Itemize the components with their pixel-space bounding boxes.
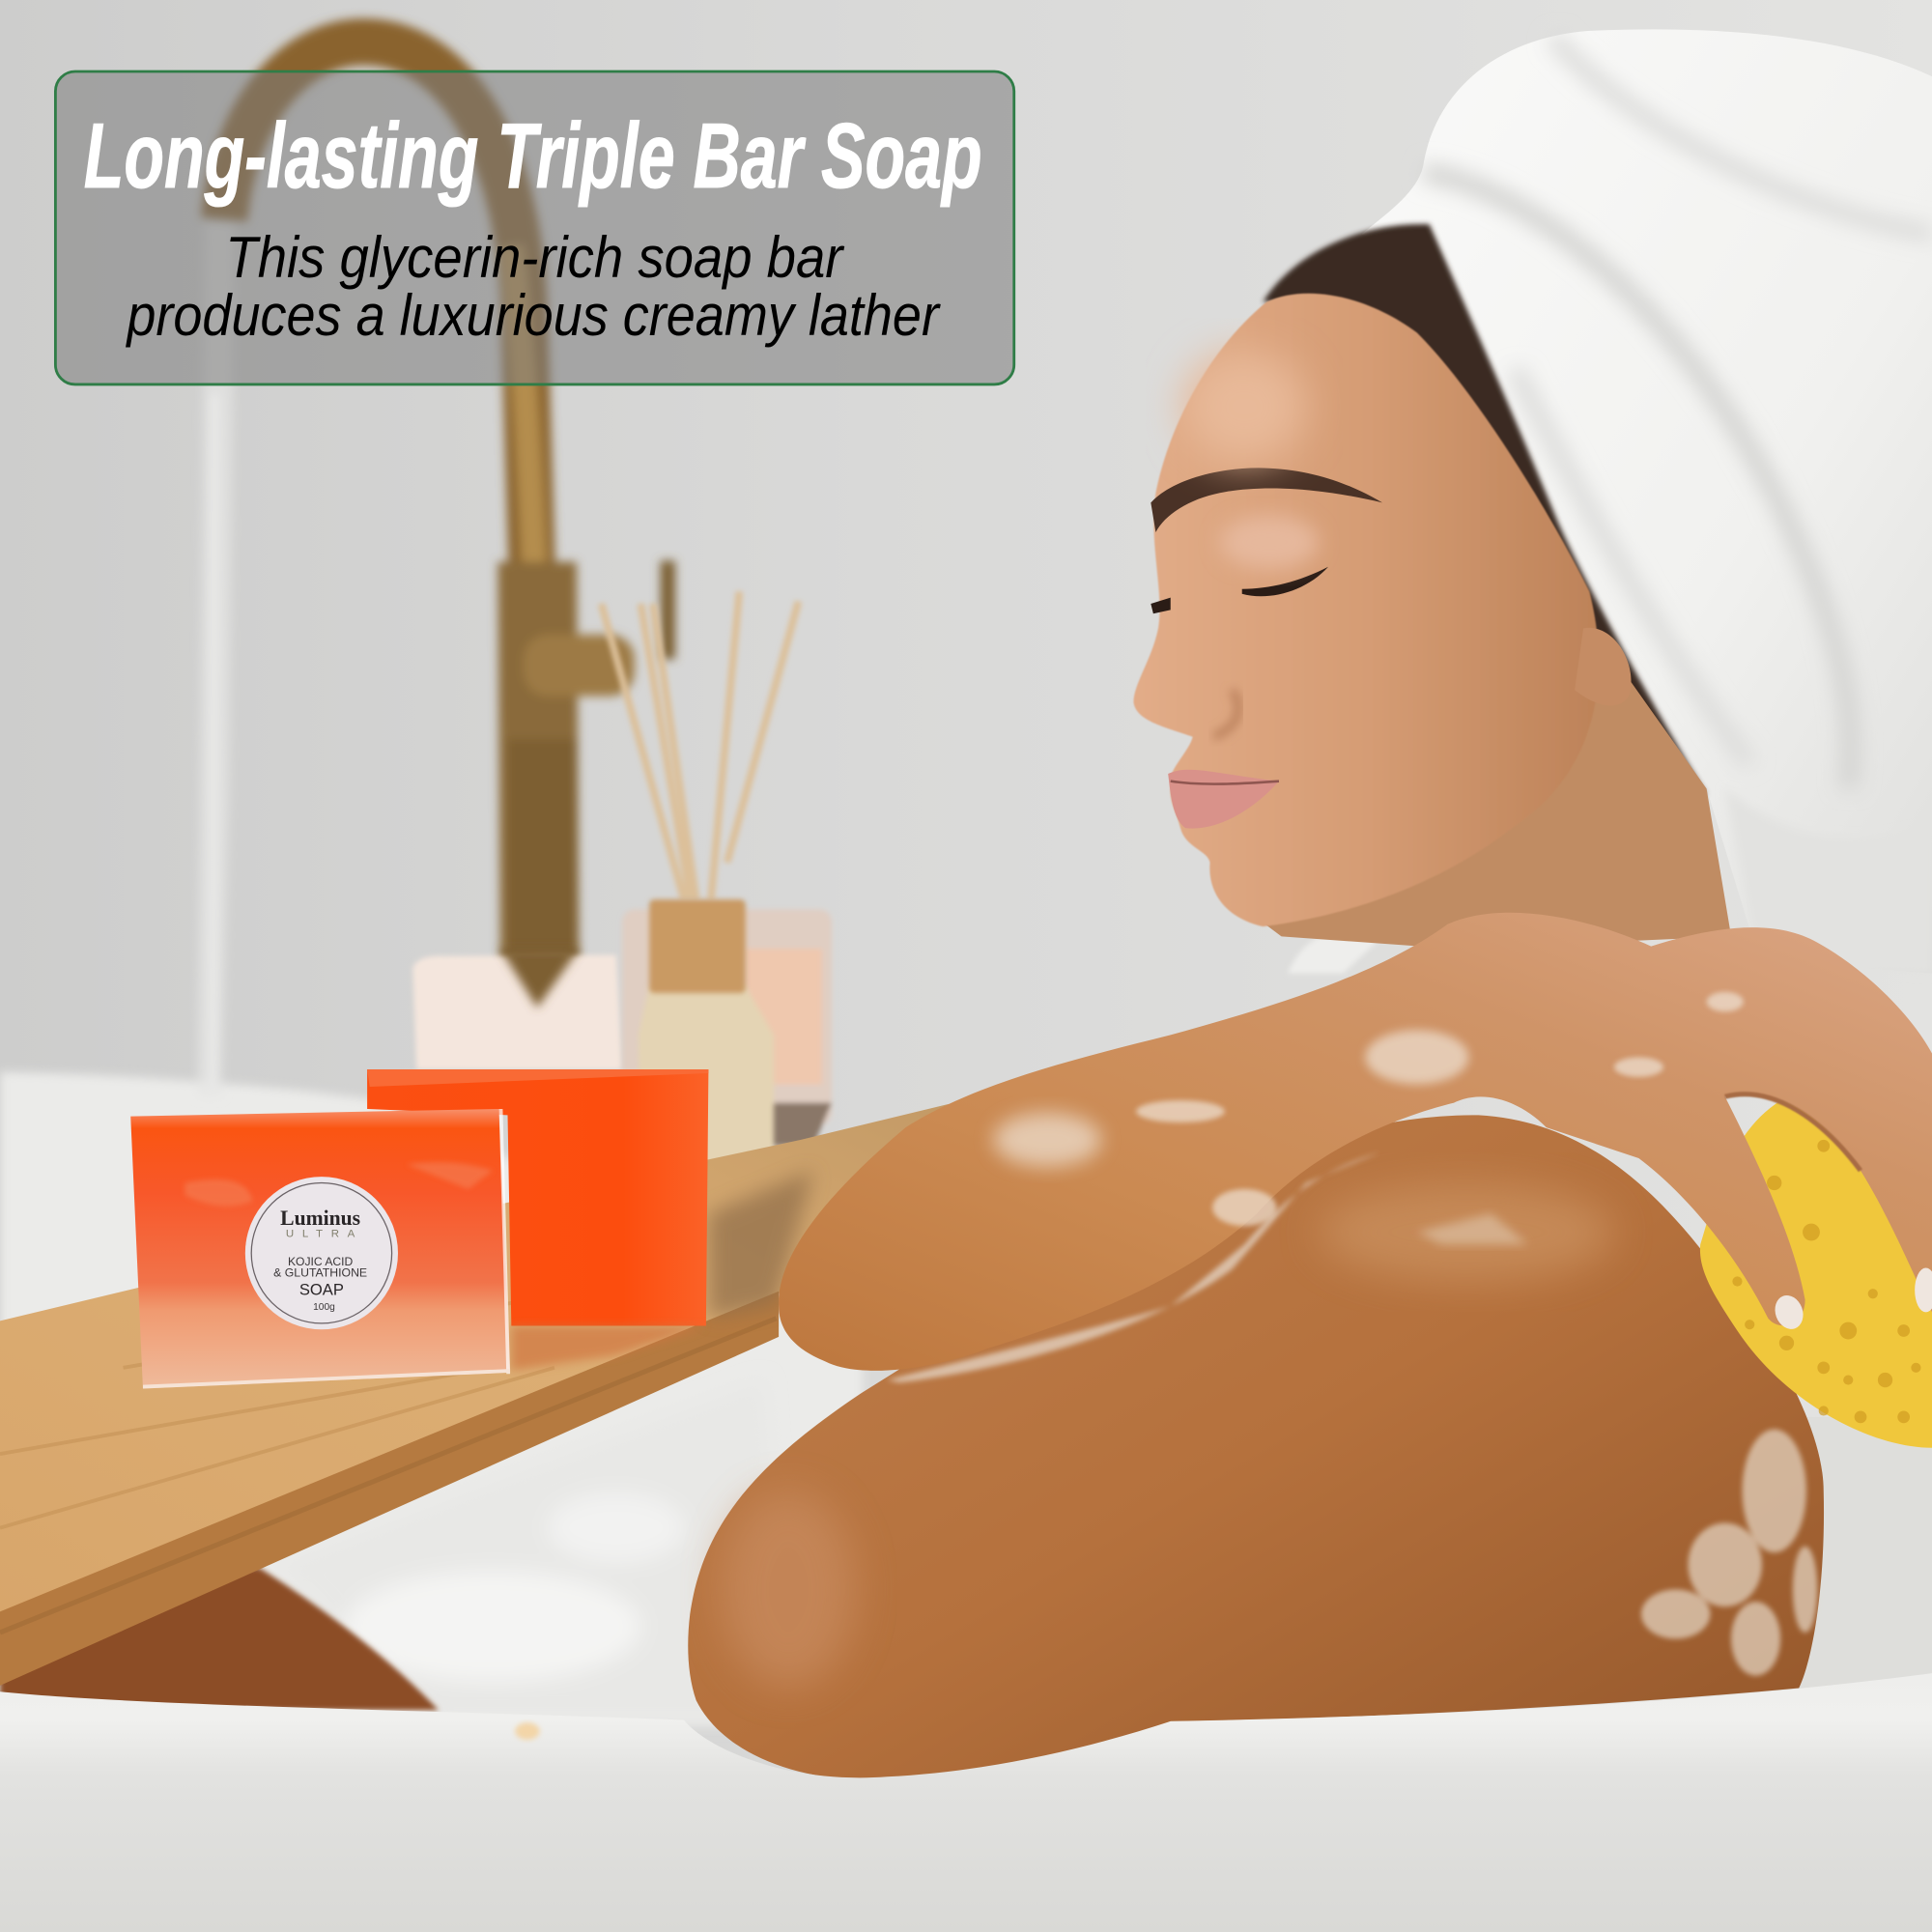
front soap bar	[130, 1109, 510, 1389]
product label: ULTRA	[286, 1229, 355, 1240]
bath foam	[277, 1380, 788, 1719]
reed diffuser	[601, 591, 799, 1193]
towel	[1361, 29, 1932, 974]
fingernails	[1771, 1292, 1807, 1333]
foam patches on forearm	[993, 992, 1744, 1226]
product label: SOAP	[299, 1281, 344, 1299]
neck	[1233, 640, 1731, 949]
product label: Luminus	[280, 1207, 360, 1230]
brass faucet	[224, 42, 675, 1006]
back soap bar	[367, 1069, 708, 1370]
subtitle	[126, 225, 941, 348]
headline panel	[55, 71, 1014, 384]
ear	[1575, 628, 1632, 705]
subtitle: produces a luxurious creamy lather	[126, 283, 941, 348]
forehead highlight	[1182, 352, 1306, 462]
eyelid highlight	[1220, 515, 1319, 569]
face	[1133, 294, 1632, 926]
nose shading	[1213, 690, 1238, 737]
glass candle jar	[622, 909, 832, 1146]
foam between arms	[887, 1152, 1380, 1382]
forearm and hand	[779, 913, 1932, 1371]
towel under arm	[1288, 922, 1399, 974]
wooden bath tray	[0, 1104, 949, 1686]
finger lines	[1725, 1094, 1861, 1171]
product label: KOJIC ACID	[288, 1255, 354, 1268]
product label: 100g	[313, 1302, 335, 1313]
closed eyelashes	[1151, 567, 1328, 613]
bathtub back rim and interior	[0, 1072, 1932, 1725]
water stream	[197, 222, 234, 1096]
title: Long-lasting Triple Bar Soap	[84, 104, 982, 208]
candle	[412, 955, 622, 1069]
hair	[1263, 224, 1707, 795]
bathtub front edge	[0, 1673, 1932, 1932]
chest foam	[1641, 1430, 1817, 1676]
lips	[1168, 770, 1279, 829]
sponge	[1700, 1087, 1932, 1448]
product label: & GLUTATHIONE	[273, 1265, 367, 1279]
subtitle: This glycerin-rich soap bar	[225, 225, 844, 290]
re-draw of faucet base over candle	[500, 949, 579, 1008]
woman's knee	[0, 1567, 439, 1710]
eyebrow	[1151, 468, 1382, 532]
lower arm and shoulder	[688, 1115, 1824, 1780]
product label	[245, 1177, 398, 1329]
